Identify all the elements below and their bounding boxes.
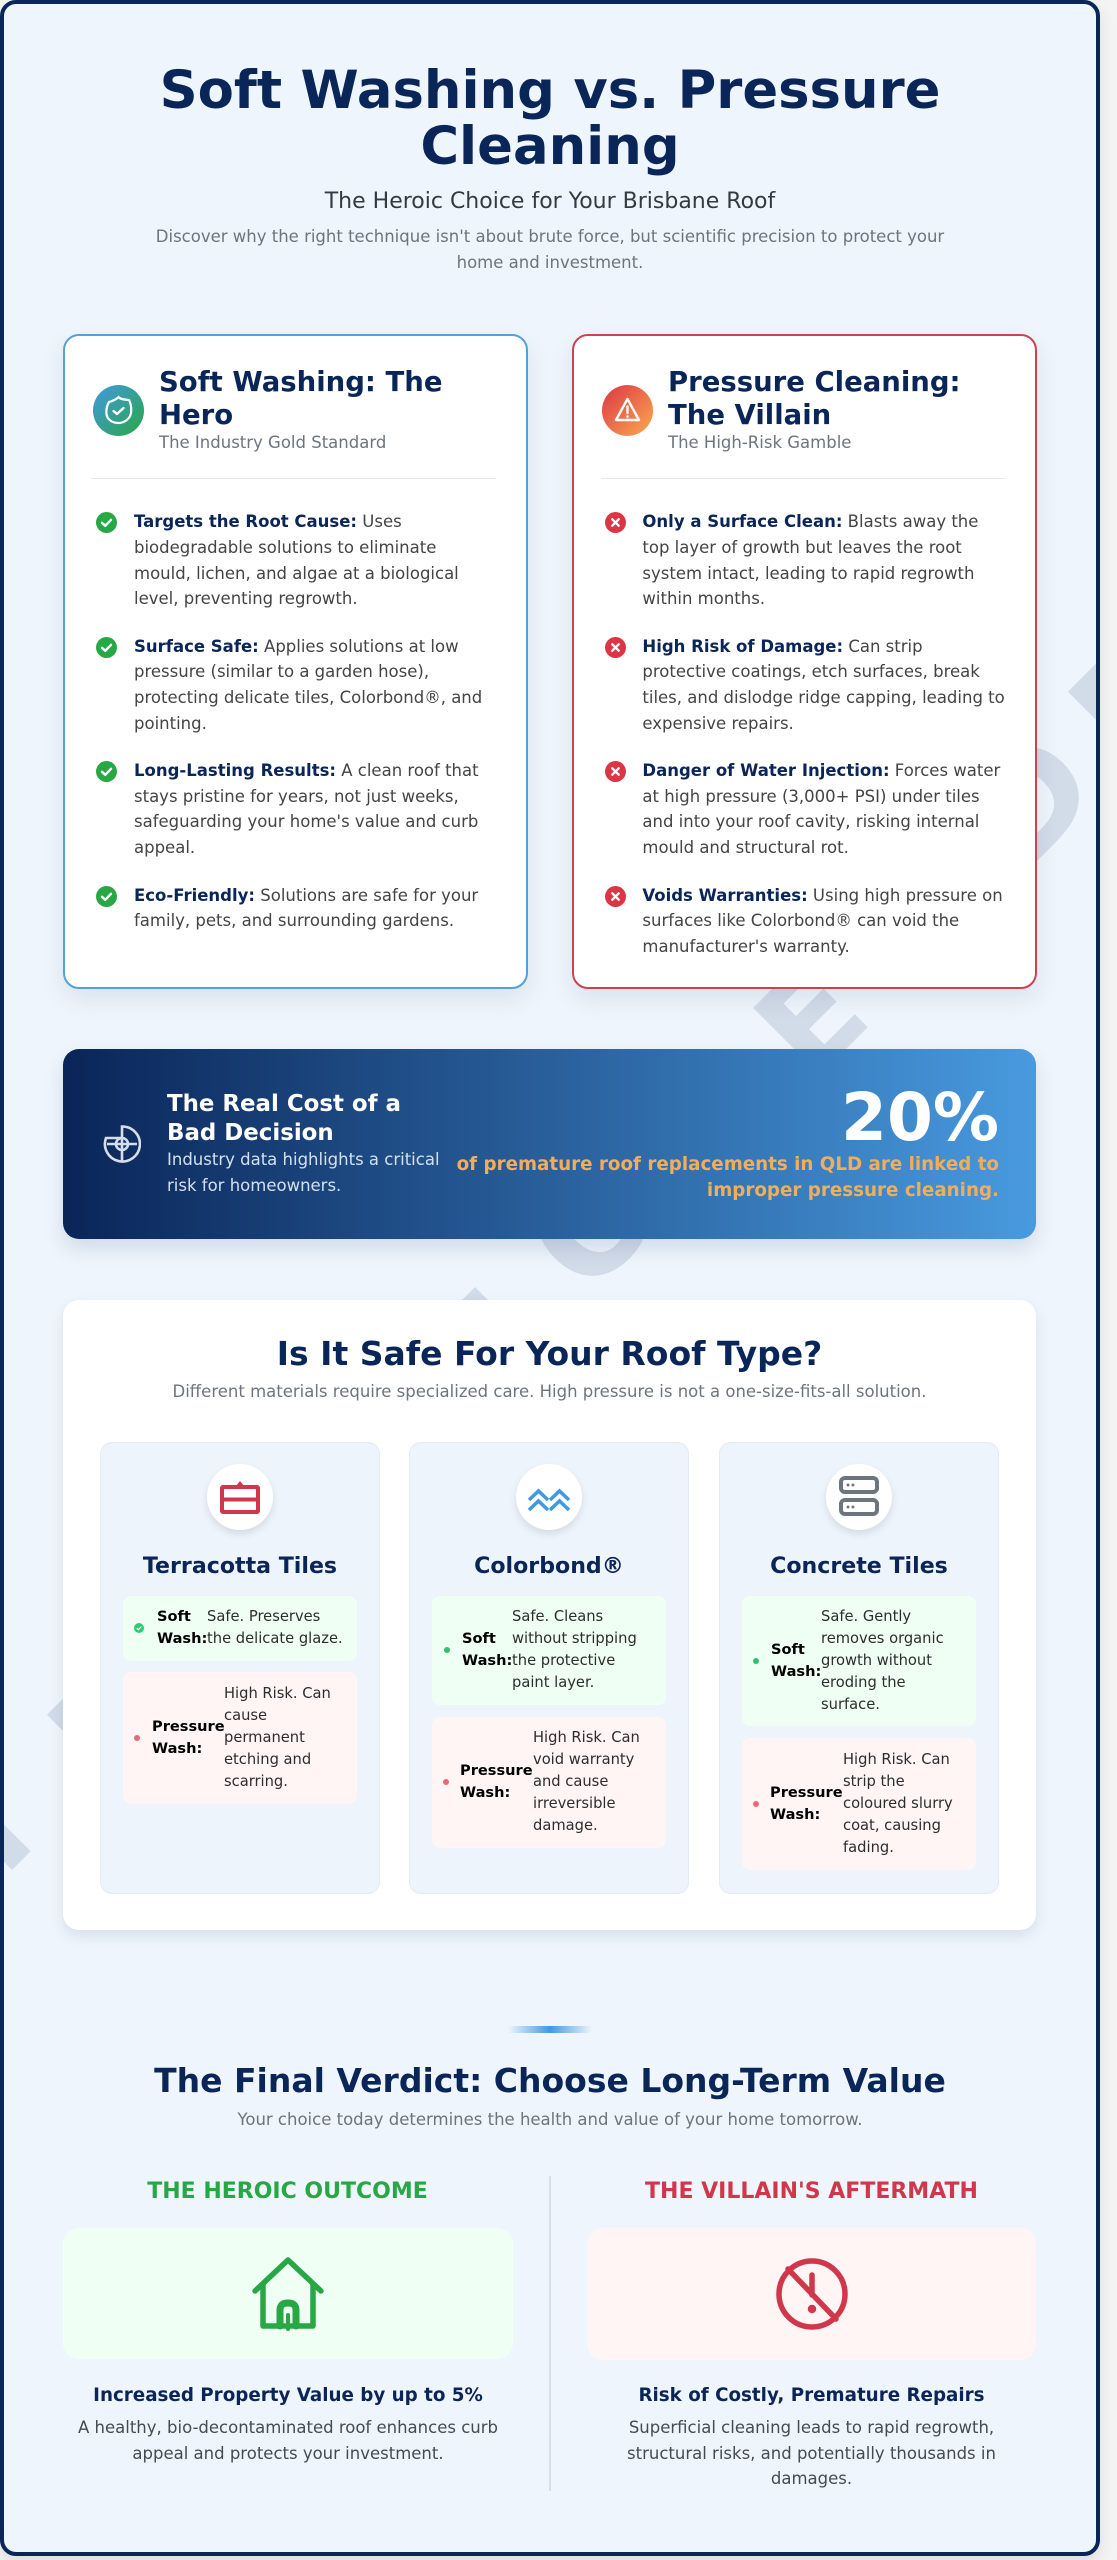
description: strip the [843,1773,905,1790]
statistic: 20%: 20% [841,1079,999,1156]
description: void warranty [533,1751,634,1768]
description: the delicate glaze. [207,1630,343,1647]
risk: water injection: at high pressure (3,000+ PSI) under tiles [642,787,980,806]
description [533,1729,640,1834]
title: Soft Washing vs. Pressure [160,60,940,121]
description: paint layer. [512,1674,594,1691]
banner heading: The Real Cost of a [167,1090,401,1116]
icon: safe dot [444,1647,450,1653]
heading [668,366,961,430]
label: Wash: [460,1784,510,1801]
label [462,1630,512,1669]
pressure wash verdict [123,1672,357,1804]
icon: cross [605,637,626,658]
pressure wash verdict [432,1717,666,1848]
banner text: risk for homeowners. [167,1176,341,1195]
benefit: eco friendly [134,886,478,930]
aftermath text: Superficial cleaning leads to rapid regrowth, [629,2418,994,2437]
label: Wash: [771,1663,821,1680]
panel: real cost banner [63,1049,1036,1239]
aftermath title: Risk of Costly, Premature Repairs [638,2385,985,2406]
heading: Soft Washing: The [159,366,442,398]
risk: water injection: mould and structural rot. [642,838,849,857]
aftermath text: structural risks, and potentially thousands in [627,2444,996,2462]
description: High Risk. Can [533,1729,640,1746]
benefit: surface safe: protecting delicate tiles, Colorbond®, and [134,688,482,707]
benefit: long lasting: appeal. [134,838,195,857]
benefit: root cause: level, preventing regrowth. [134,589,358,608]
description: eroding the [821,1674,906,1691]
verdict heading: The Final Verdict: Choose Long-Term Value [154,2061,946,2100]
outcome box: house [63,2228,513,2359]
benefit: surface safe [134,637,482,733]
intro text: Discover why the right technique isn't about brute force, but scientific precision to protect your [156,227,944,246]
icon: cross [605,512,626,533]
description [843,1751,953,1856]
description: High Risk. Can [224,1685,331,1702]
heading: Pressure Cleaning: [668,366,961,398]
roof card: terracotta [100,1442,380,1894]
banner heading [167,1090,401,1146]
benefit: root cause: Targets the Root Cause: Uses [134,512,402,531]
icon: check [96,637,117,658]
statistic caption: of premature roof replacements in QLD are linked to [457,1154,999,1174]
heading: villain aftermath: THE VILLAIN'S AFTERMATH [645,2178,978,2204]
benefit: eco friendly: family, pets, and surrounding gardens. [134,911,454,930]
description [207,1608,343,1647]
icon: cross [605,761,626,782]
benefit: long lasting: safeguarding your home's value and curb [134,812,478,831]
description: and cause [533,1773,608,1790]
intro text: home and investment. [457,253,643,272]
heading: The Villain [668,398,831,430]
statistic caption [457,1154,999,1200]
risk: warranties: manufacturer's warranty. [642,937,850,956]
label [770,1784,843,1823]
label: Soft [771,1641,805,1658]
benefit: surface safe: pointing. [134,714,207,733]
label: Wash: [770,1806,820,1823]
description [512,1608,637,1691]
icon: risk dot [443,1779,449,1785]
label: Pressure [152,1718,225,1735]
heading: heroic outcome: THE HEROIC OUTCOME [147,2178,428,2204]
card title: Terracotta Tiles [143,1552,337,1578]
benefit: surface safe: pressure (similar to a garden hose), [134,662,429,681]
label: Soft [157,1608,191,1625]
icon: check [96,886,117,907]
banner heading: Bad Decision [167,1120,334,1146]
icon: risk dot [753,1801,759,1807]
description: the protective [512,1652,615,1669]
description: scarring. [224,1773,288,1790]
description: coat, causing [843,1817,941,1834]
description: permanent [224,1729,305,1746]
description: irreversible [533,1795,616,1812]
icon: terracotta tile [207,1464,273,1530]
risk: surface clean: top layer of growth but leaves the root [642,538,962,557]
benefit: root cause: biodegradable solutions to eliminate [134,538,436,557]
icon: no entry [776,2257,848,2331]
heading: Hero [159,398,233,430]
label [771,1641,821,1680]
icon: safe dot [134,1623,144,1633]
icon: cross [605,886,626,907]
watermark: I [428,1259,580,1411]
description: growth without [821,1652,932,1669]
outcome text: appeal and protects your investment. [132,2444,444,2462]
risk: surface clean: system intact, leading to rapid regrowth [642,564,974,583]
icon: house [252,2257,324,2331]
title [160,60,940,177]
label: Wash: [462,1652,512,1669]
benefit: root cause: mould, lichen, and algae at a biological [134,564,459,583]
risk: water injection: and into your roof cavity, risking internal [642,812,979,831]
tagline: The Industry Gold Standard [159,433,386,452]
aftermath text: damages. [771,2469,852,2488]
soft wash verdict [123,1596,357,1661]
outcome text [63,2415,513,2466]
roof card: concrete [719,1442,999,1894]
outcome box: warning [587,2228,1036,2360]
soft wash verdict [742,1596,976,1726]
heading [159,366,442,430]
aftermath text [587,2415,1036,2492]
description: coloured slurry [843,1795,953,1812]
tagline: The High-Risk Gamble [668,433,851,452]
banner text: Industry data highlights a critical [167,1150,440,1169]
risk: warranties: Voids Warranties: Using high pressure on [642,886,1003,905]
description: Safe. Preserves [207,1608,320,1625]
panel: pressure cleaning villain [572,334,1037,989]
label [152,1718,225,1757]
icon: shield [93,385,144,436]
label: Pressure [460,1762,533,1779]
benefit: surface safe: Surface Safe: Applies solutions at low [134,637,459,656]
panel: soft washing hero [63,334,528,989]
intro text [156,227,944,272]
watermark: E [726,935,896,1105]
soft wash verdict [432,1596,666,1705]
statistic caption: improper pressure cleaning. [707,1180,999,1200]
benefit: long lasting [134,761,479,857]
outcome text: A healthy, bio-decontaminated roof enhances curb [78,2418,498,2437]
label [460,1762,533,1801]
label: Wash: [152,1740,202,1757]
label [157,1608,207,1647]
risk: surface clean: Only a Surface Clean: Blasts away the [642,512,978,531]
title: Cleaning [420,116,680,177]
description: High Risk. Can [843,1751,950,1768]
risk: damage: protective coatings, etch surfaces, break [642,662,980,681]
roof card: colorbond [409,1442,689,1894]
outcome title: Increased Property Value by up to 5% [93,2385,483,2406]
section subheading: Different materials require specialized care. High pressure is not a one-size-fits-all solution. [173,1382,926,1401]
description [821,1608,944,1713]
risk: water injection [642,761,1000,857]
risk: damage: tiles, and dislodge ridge capping, leading to [642,688,1005,707]
risk: damage: expensive repairs. [642,714,794,733]
risk: warranties [642,886,1003,956]
description: fading. [843,1839,894,1856]
icon: concrete tile [826,1464,892,1530]
icon: colorbond chevrons [516,1464,582,1530]
label: Soft [462,1630,496,1647]
description: damage. [533,1817,598,1834]
card title: Colorbond® [474,1552,624,1578]
benefit: long lasting: Long-Lasting Results: A clean roof that [134,761,479,780]
icon: check [96,761,117,782]
description: Safe. Cleans [512,1608,603,1625]
verdict subheading: Your choice today determines the health and value of your home tomorrow. [237,2110,863,2129]
description: etching and [224,1751,311,1768]
risk: water injection: Danger of Water Injection: Forces water [642,761,1000,780]
risk: surface clean [642,512,978,608]
icon: risk dot [134,1735,140,1741]
pressure wash verdict [742,1738,976,1870]
risk: damage [642,637,1005,733]
icon: check [96,512,117,533]
icon: warning [602,385,653,436]
banner text [167,1150,440,1195]
watermark: E [19,1637,202,1820]
subtitle: The Heroic Choice for Your Brisbane Roof [325,189,775,214]
description: without stripping [512,1630,637,1647]
icon: safe dot [753,1658,759,1664]
description: Safe. Gently [821,1608,911,1625]
description: cause [224,1707,267,1724]
description: removes organic [821,1630,944,1647]
benefit: eco friendly: Eco-Friendly: Solutions are safe for your [134,886,478,905]
risk: damage: High Risk of Damage: Can strip [642,637,923,656]
label: Pressure [770,1784,843,1801]
description: surface. [821,1696,880,1713]
description [224,1685,331,1790]
panel: roof type safety [63,1300,1036,1930]
risk: surface clean: within months. [642,589,765,608]
card title: Concrete Tiles [770,1552,948,1578]
benefit: long lasting: stays pristine for years, not just weeks, [134,787,459,806]
icon: compass target [104,1125,141,1163]
label: Wash: [157,1630,207,1647]
section heading: Is It Safe For Your Roof Type? [277,1334,822,1373]
benefit: root cause [134,512,459,608]
watermark: O [495,1124,694,1323]
risk: warranties: surfaces like Colorbond® can void the [642,911,959,930]
